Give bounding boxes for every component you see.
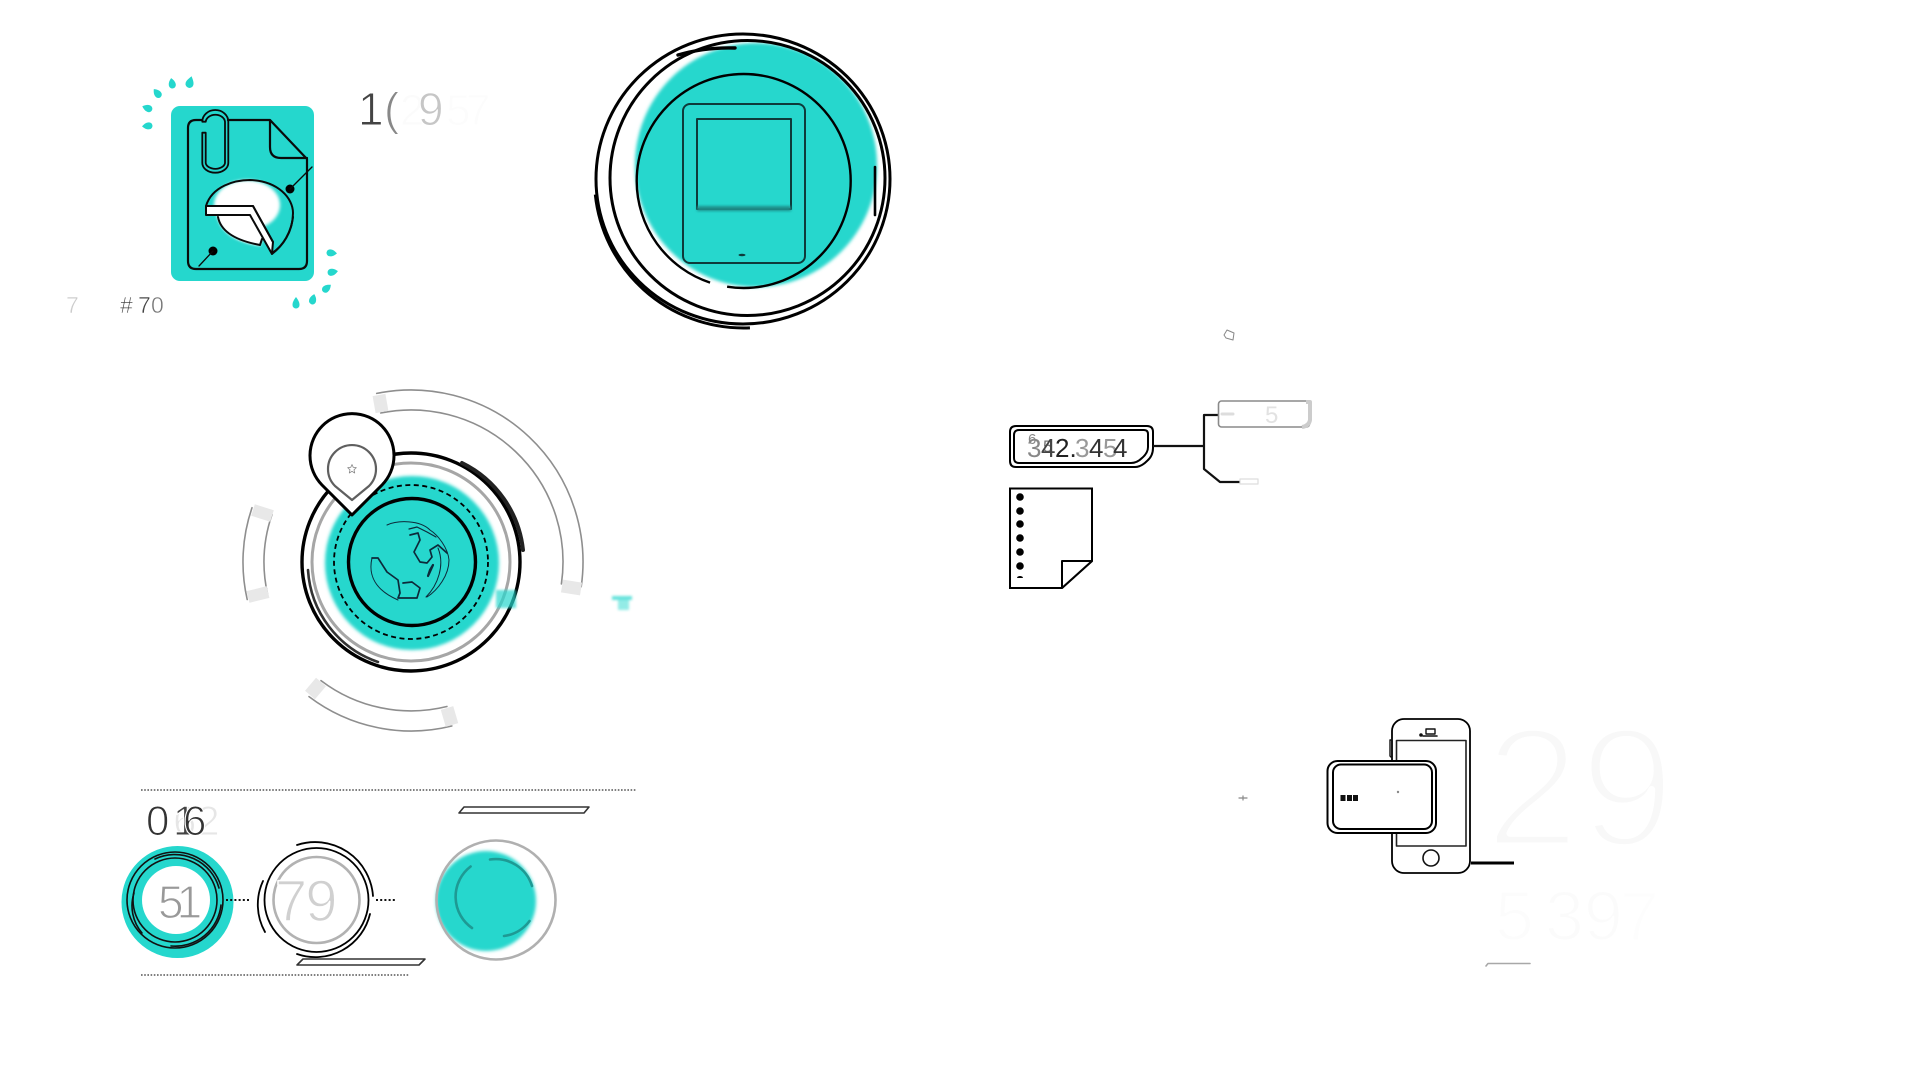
panel: tablet in circle (594, 30, 892, 328)
text: counter top: 9 (418, 83, 444, 135)
gauge: teal circle 51: 51 (158, 876, 201, 928)
text: year counter: 6 (183, 797, 206, 844)
chart: pie chart (206, 180, 293, 254)
icon: teal drops bottom right (292, 249, 339, 308)
concentric swirl rings (594, 30, 892, 328)
teal disc (325, 476, 499, 650)
text: faded large number: 2 (1485, 693, 1580, 883)
text: counter bottom: 7 (66, 292, 79, 318)
text: counter top: 7 (466, 86, 490, 135)
outer arc: left (243, 508, 272, 600)
label bar (1486, 964, 1530, 966)
text: counter top (358, 83, 490, 135)
inner circle (637, 74, 851, 288)
text: counter bottom: 0 (151, 292, 164, 318)
value box: 2. (1055, 433, 1077, 463)
connector line (1471, 862, 1514, 864)
text: counter bottom: # (120, 292, 133, 318)
icon: location pin (310, 414, 394, 515)
label bar top (459, 807, 589, 813)
text: counter bottom (66, 292, 164, 318)
text: counter bottom: 7 (138, 292, 151, 318)
small label box: 5 (1265, 402, 1278, 429)
icon: page outline (188, 120, 307, 269)
dotted link 2 (376, 899, 395, 901)
outer arc: right (377, 390, 583, 589)
icon: smartphone (1390, 719, 1470, 873)
small label box (1218, 401, 1310, 429)
teal smudges (496, 590, 632, 610)
teal disc (635, 43, 877, 287)
icon: teal drops top left (141, 75, 195, 130)
text: faded small number: 39 (1545, 877, 1623, 955)
text: year counter: 62 (173, 797, 220, 844)
icon: earth (371, 522, 449, 600)
text: faded small number (1495, 877, 1659, 955)
connector lines (1153, 415, 1240, 482)
text: year counter: 0 (146, 797, 169, 844)
panel: bottom-left percentage circles (127, 790, 637, 975)
dotted rule top (141, 789, 637, 791)
text: counter top: 5 (446, 86, 470, 135)
value box: 5 (1043, 437, 1052, 456)
gauge: solid teal circle (436, 840, 556, 960)
teal document tile (171, 106, 314, 281)
icon: paperclip (202, 110, 228, 173)
panel: value box and note (1010, 330, 1310, 588)
value box: 3 (1027, 433, 1041, 463)
label bar bottom (297, 959, 425, 965)
value box: 5 (1103, 433, 1117, 463)
panel: document pie chart icon (66, 75, 490, 318)
main rings (302, 453, 523, 671)
text: year counter (146, 797, 220, 844)
small grey tag (1240, 479, 1258, 484)
gauge: teal circle 51 (127, 852, 223, 948)
small tumbling shape (1224, 330, 1234, 340)
value box: 6 (1028, 431, 1036, 448)
text: faded small number: 7 (1620, 877, 1659, 955)
text: faded large number (1485, 693, 1675, 883)
panel: globe location graphic (243, 390, 632, 731)
text: counter top: 2 (400, 86, 424, 135)
text: faded small number: 5 (1495, 877, 1534, 955)
icon: note page (1010, 488, 1092, 588)
gauge: outline circle 79: 79 (275, 869, 336, 934)
callout dots (199, 167, 312, 266)
gauge: outline circle 79 (258, 842, 373, 957)
small mark (1239, 796, 1247, 800)
value box: 4 (1041, 433, 1055, 463)
value box (1010, 426, 1153, 467)
icon: bank card (1328, 761, 1436, 833)
text: year counter: 1 (173, 797, 196, 844)
text: counter top: 1 (358, 83, 384, 135)
dotted rule bottom (141, 974, 409, 976)
value box: 3 (1075, 433, 1089, 463)
outer arc: bottom (309, 681, 452, 731)
icon: tablet (683, 104, 805, 263)
text: counter top: ( (384, 83, 400, 135)
panel: phone and card (1239, 693, 1675, 966)
text: faded large number: 9 (1580, 693, 1675, 883)
value box: 4 (1113, 433, 1127, 463)
value box: 4 (1089, 433, 1103, 463)
dotted link 1 (226, 899, 251, 901)
